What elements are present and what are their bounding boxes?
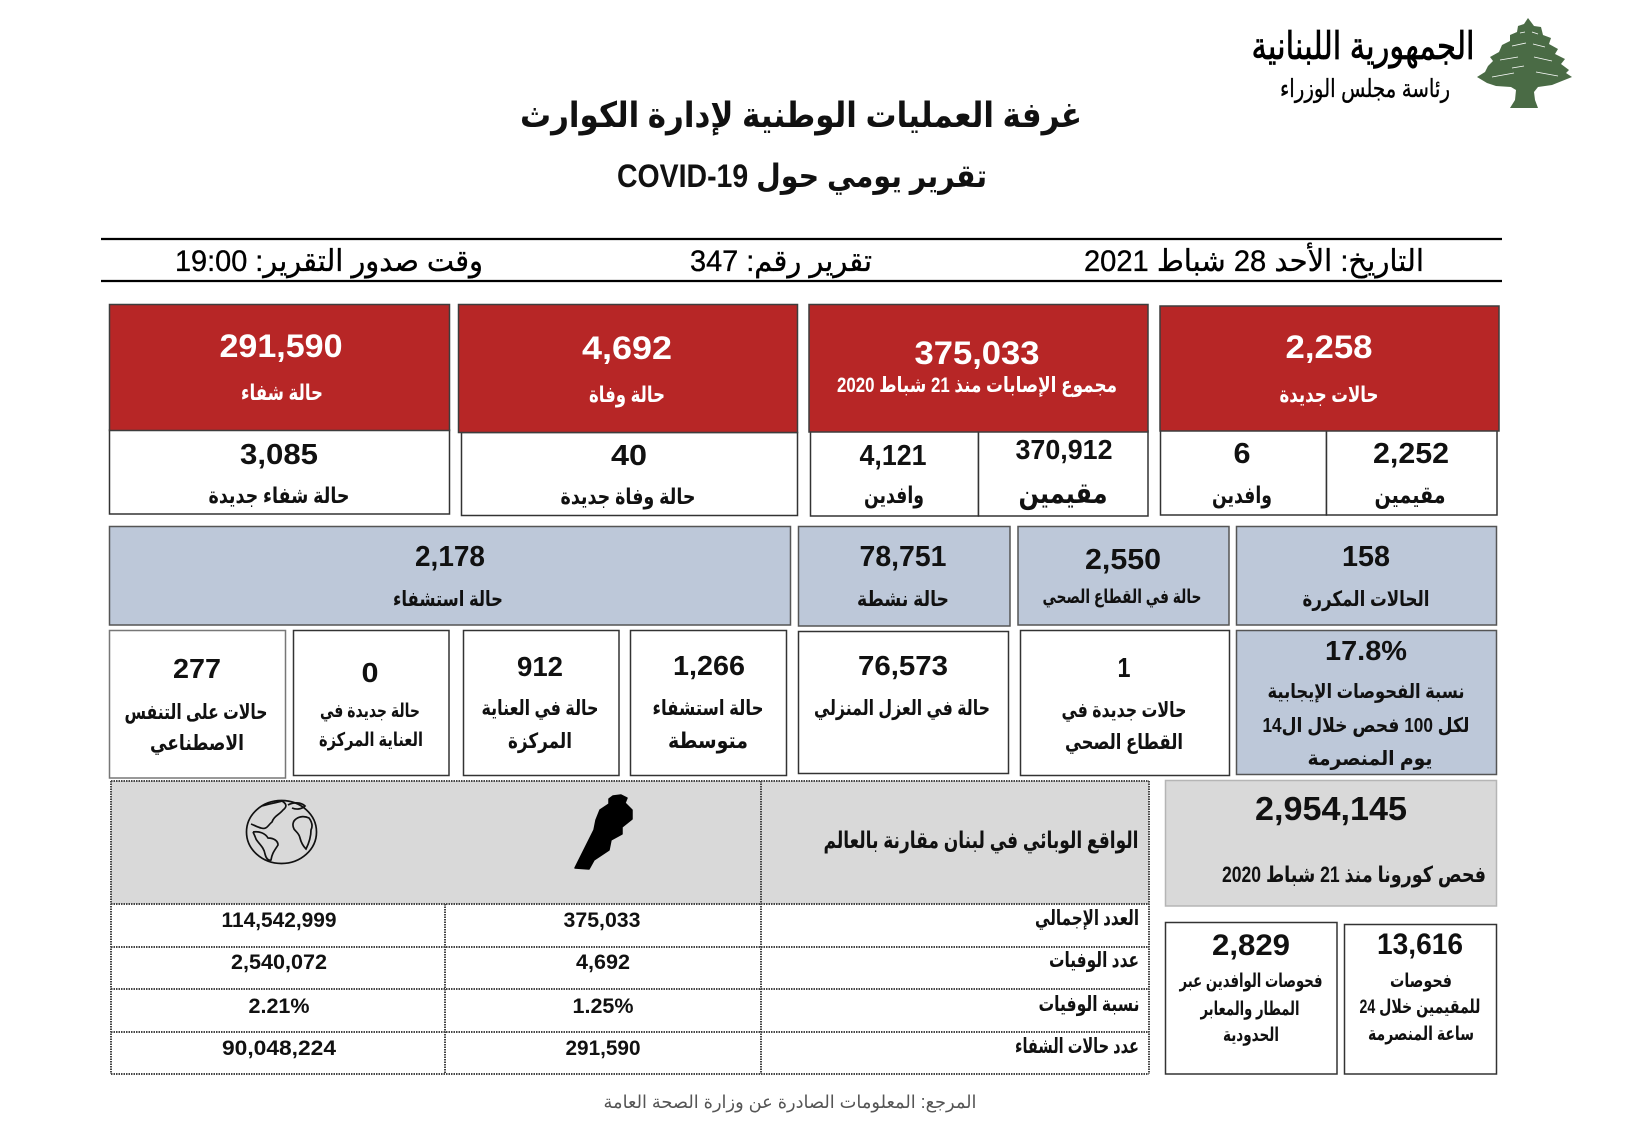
panel: total cases: وافدين <box>864 482 924 509</box>
card: residents tests: للمقيمين خلال 24 <box>1359 997 1480 1018</box>
panel: new cases: وافدين <box>1212 482 1272 509</box>
icon: cedar tree <box>1477 18 1572 108</box>
panel: total PCR tests: 2,954,145 <box>1255 790 1407 827</box>
row: death rate <box>248 993 1140 1018</box>
card: artificial respiration: 277 <box>173 653 221 684</box>
card: arrivals tests: فحوصات الوافدين عبر <box>1179 971 1322 992</box>
panel: positivity rate: يوم المنصرمة <box>1308 748 1432 770</box>
table heading: الواقع الوبائي في لبنان مقارنة بالعالم <box>824 827 1138 854</box>
panel: total cases <box>809 304 1148 516</box>
panel: hospitalised: 2,178 <box>415 541 485 573</box>
panel: total PCR tests: فحص كورونا منذ 21 شباط 2020 <box>1222 862 1486 888</box>
panel: new cases: 2,252 <box>1373 438 1449 470</box>
row: recoveries: 90,048,224 <box>222 1037 336 1060</box>
panel: positivity rate: 17.8% <box>1325 635 1407 666</box>
panel: repeated cases: الحالات المكررة <box>1302 588 1430 611</box>
panel: positivity rate: لكل 100 فحص خلال ال14 <box>1262 715 1470 737</box>
panel: hospitalised <box>110 526 790 625</box>
card: moderate hospitalisation: متوسطة <box>668 728 748 754</box>
row: recoveries <box>222 1035 1139 1060</box>
row: total cases <box>222 907 1139 932</box>
table: Lebanon compared with the world <box>111 781 1149 1074</box>
panel: total cases: مقيمين <box>1018 478 1108 510</box>
card: artificial respiration: الاصطناعي <box>150 732 244 755</box>
card: home isolation: حالة في العزل المنزلي <box>814 697 990 720</box>
card: residents tests: فحوصات <box>1390 971 1452 992</box>
panel: recoveries: حالة شفاء <box>241 380 323 405</box>
panel: recoveries: 291,590 <box>220 328 342 364</box>
panel: total cases: 370,912 <box>1016 434 1112 465</box>
report number: تقرير رقم: 347 <box>690 245 872 279</box>
panel: new cases: 2,258 <box>1286 329 1372 365</box>
card: new ICU cases: حالة جديدة في <box>320 701 420 722</box>
logo: Lebanese Republic presidency of the council of ministers <box>1252 18 1572 108</box>
row: deaths: عدد الوفيات <box>1049 949 1139 972</box>
panel: active cases <box>798 526 1010 626</box>
panel: new cases: حالات جديدة <box>1280 382 1378 407</box>
panel: health sector cases: 2,550 <box>1085 544 1161 576</box>
panel: health sector cases <box>1018 526 1229 625</box>
card: artificial respiration <box>110 630 286 778</box>
panel: deaths <box>458 304 798 516</box>
card: moderate hospitalisation: حالة استشفاء <box>652 697 764 720</box>
panel: total cases: 375,033 <box>914 335 1040 371</box>
card: ICU cases <box>464 630 619 776</box>
panel: deaths: حالة وفاة <box>589 382 665 408</box>
row: total cases: العدد الإجمالي <box>1035 907 1139 930</box>
panel: total cases: 4,121 <box>860 440 926 472</box>
card: home isolation <box>798 632 1008 774</box>
logo calligraphy: republic name: الجمهورية اللبنانية <box>1252 26 1474 69</box>
panel: active cases: حالة نشطة <box>857 588 949 611</box>
subtitle: تقرير يومي حول COVID-19 <box>617 158 987 195</box>
panel: recoveries <box>110 304 450 514</box>
card: ICU cases: المركزة <box>508 730 572 753</box>
card: home isolation: 76,573 <box>858 650 948 681</box>
row: death rate: 1.25% <box>572 995 634 1018</box>
card: new ICU cases: العناية المركزة <box>319 730 423 751</box>
card: new ICU cases <box>294 630 449 776</box>
report date: التاريخ: الأحد 28 شباط 2021 <box>1084 241 1424 279</box>
panel: repeated cases: 158 <box>1342 541 1390 573</box>
row: death rate: نسبة الوفيات <box>1038 993 1140 1016</box>
row: total cases: 375,033 <box>564 909 640 932</box>
card: arrivals tests <box>1166 922 1337 1074</box>
card: artificial respiration: حالات على التنفس <box>124 701 268 724</box>
report info bar <box>101 239 1502 281</box>
card: new health sector cases: القطاع الصحي <box>1065 731 1183 754</box>
panel: new cases: 6 <box>1234 438 1250 470</box>
panel: total PCR tests <box>1166 780 1496 906</box>
row: total cases: 114,542,999 <box>222 909 336 932</box>
logo calligraphy: council of ministers: رئاسة مجلس الوزراء <box>1280 75 1450 103</box>
panel: hospitalised: حالة استشفاء <box>393 588 503 611</box>
card: ICU cases: حالة في العناية <box>482 697 598 720</box>
card: new health sector cases <box>1020 630 1230 776</box>
panel: new cases: مقيمين <box>1374 482 1446 509</box>
row: deaths: 2,540,072 <box>231 951 327 974</box>
card: new health sector cases: حالات جديدة في <box>1062 699 1186 722</box>
row: deaths: 4,692 <box>576 951 630 974</box>
card: arrivals tests: 2,829 <box>1212 929 1290 962</box>
panel: deaths: حالة وفاة جديدة <box>560 484 696 510</box>
panel: recoveries: حالة شفاء جديدة <box>208 483 350 508</box>
row: deaths <box>231 949 1139 974</box>
panel: active cases: 78,751 <box>860 541 946 573</box>
panel: total cases: مجموع الإصابات منذ 21 شباط 2020 <box>837 374 1117 397</box>
card: moderate hospitalisation <box>630 630 786 776</box>
icon: globe <box>246 800 316 864</box>
card: new health sector cases: 1 <box>1118 652 1130 683</box>
card: ICU cases: 912 <box>517 651 563 682</box>
card: moderate hospitalisation: 1,266 <box>673 650 745 681</box>
card: residents tests: ساعة المنصرمة <box>1368 1024 1474 1045</box>
panel: positivity rate: نسبة الفحوصات الإيجابية <box>1268 681 1464 703</box>
card: residents tests: 13,616 <box>1377 928 1463 961</box>
panel: deaths: 4,692 <box>582 330 672 366</box>
panel: new cases <box>1160 306 1499 515</box>
panel: positivity rate <box>1236 630 1496 774</box>
panel: deaths: 40 <box>611 440 647 472</box>
row: recoveries: عدد حالات الشفاء <box>1015 1035 1139 1058</box>
card: new ICU cases: 0 <box>362 657 378 688</box>
card: arrivals tests: الحدودية <box>1223 1025 1279 1046</box>
card: residents tests <box>1344 924 1496 1074</box>
row: recoveries: 291,590 <box>566 1037 640 1060</box>
source note: المرجع: المعلومات الصادرة عن وزارة الصحة العامة <box>604 1092 976 1113</box>
report time: وقت صدور التقرير: 19:00 <box>175 245 483 279</box>
panel: repeated cases <box>1236 526 1496 625</box>
icon: Lebanon map <box>575 795 632 869</box>
card: arrivals tests: المطار والمعابر <box>1200 999 1300 1020</box>
panel: recoveries: 3,085 <box>240 439 318 471</box>
panel: health sector cases: حالة في القطاع الصحي <box>1042 587 1202 608</box>
title: غرفة العمليات الوطنية لإدارة الكوارث <box>520 96 1082 136</box>
row: death rate: 2.21% <box>248 995 310 1018</box>
